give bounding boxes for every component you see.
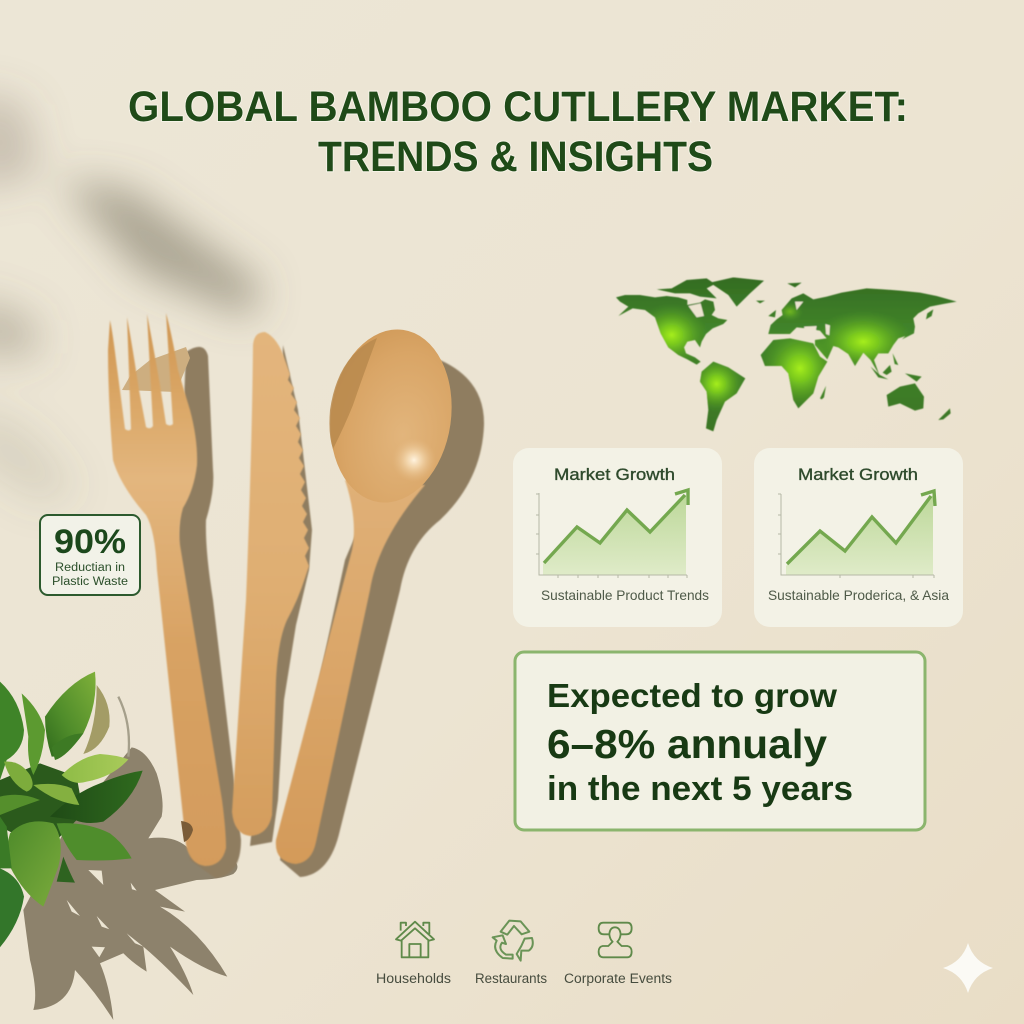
chart card: sustainable regions <box>754 448 963 627</box>
badge label: Reductian in <box>55 562 125 574</box>
label: households: Households <box>376 971 451 986</box>
plant core <box>0 763 83 840</box>
label: corporate events: Corporate Events <box>564 971 672 986</box>
spoon handle <box>276 480 425 864</box>
card heading: Market Growth <box>554 466 675 484</box>
sparkle <box>943 943 993 993</box>
leaf dark <box>50 771 143 823</box>
audience icons <box>376 921 672 986</box>
knife shadow <box>250 345 312 846</box>
card caption: Sustainable Product Trends <box>541 587 709 603</box>
leaf left <box>0 682 24 780</box>
callout text: Expected to grow <box>547 677 837 714</box>
area chart <box>778 491 935 578</box>
leaf lower big <box>7 821 61 907</box>
spoon shadow <box>280 360 484 877</box>
leaf narrow <box>22 693 45 775</box>
title: TRENDS & INSIGHTS <box>318 133 713 181</box>
icon: recycling <box>493 921 533 961</box>
leaf bright <box>62 754 128 783</box>
leaf bottom dark <box>0 868 24 947</box>
inland seas <box>795 302 830 335</box>
small leaf <box>4 761 33 792</box>
icon: households <box>396 922 434 957</box>
badge: plastic waste <box>40 515 140 595</box>
badge label <box>52 562 128 588</box>
chart card: sustainable product trends <box>513 448 722 627</box>
callout text <box>547 677 853 808</box>
area chart <box>536 490 688 578</box>
card caption: Sustainable Proderica, & Asia <box>768 587 949 603</box>
callout text: in the next 5 years <box>547 770 853 808</box>
icon: corporate events <box>599 923 632 957</box>
leaf back <box>83 685 110 754</box>
leaf top large <box>45 672 96 757</box>
blurred leaf shadows <box>0 90 262 505</box>
leaf lower right <box>57 823 132 861</box>
spoon highlight <box>392 438 436 482</box>
badge label: Plastic Waste <box>52 576 128 588</box>
card heading: Market Growth <box>798 466 918 484</box>
title <box>128 83 908 181</box>
leaf edge left <box>0 817 12 868</box>
growth callout <box>515 652 925 830</box>
badge value: 90% <box>54 523 126 561</box>
cutlery <box>108 313 484 878</box>
world map <box>616 276 957 432</box>
spoon bowl <box>319 321 463 511</box>
leaf stem curl <box>118 697 129 757</box>
small leaf right <box>33 784 79 805</box>
hudson bay <box>688 303 704 317</box>
title: GLOBAL BAMBOO CUTLLERY MARKET: <box>128 83 908 131</box>
tine shadow <box>122 347 190 392</box>
spoon inner shade <box>329 338 377 449</box>
callout text: 6–8% annualy <box>547 721 827 767</box>
knife <box>232 332 309 836</box>
plant <box>0 672 143 947</box>
leaf small dark <box>57 857 75 883</box>
plant shadow <box>23 747 237 1020</box>
label: restaurants: Restaurants <box>475 971 547 986</box>
fork shadow <box>178 347 241 878</box>
fork notch <box>181 821 193 842</box>
fork <box>108 313 226 866</box>
leaf mid-left <box>0 795 40 815</box>
